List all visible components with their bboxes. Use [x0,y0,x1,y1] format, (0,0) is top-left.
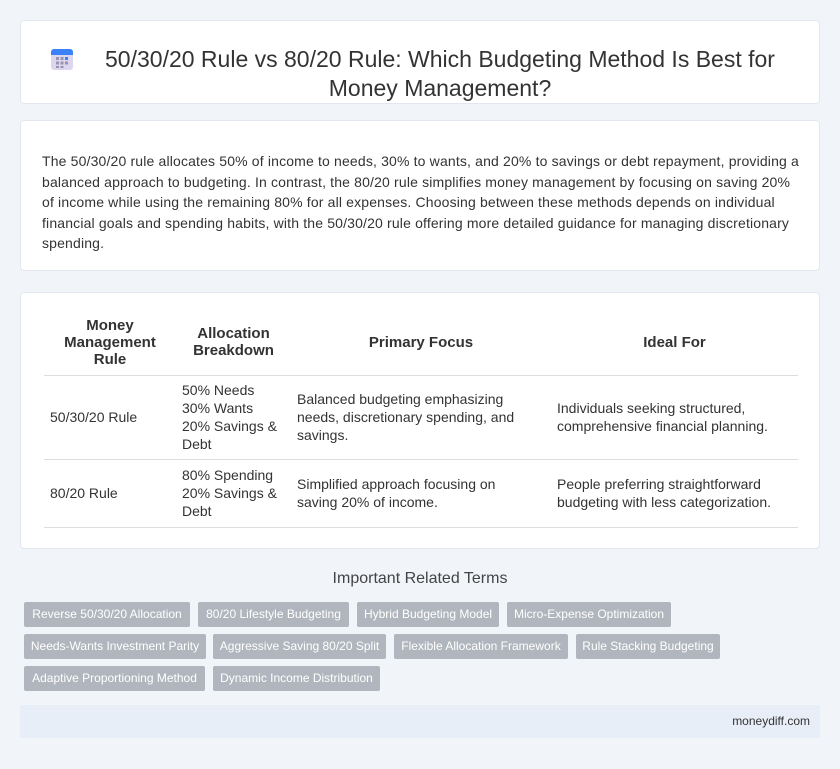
summary text: The 50/30/20 rule allocates 50% of income to needs, 30% to wants, and 20% to savings or debt repayment, providing a balanced approach to budgeting. In contrast, the 80/20 rule simplifies money management by focusing on saving 20% of income while using the remaining 80% for all expenses. Choosing between these methods depends on individual financial goals and spending habits, with the 50/30/20 rule offering more detailed guidance for managing discretionary spending. [42,153,799,251]
tags: Micro-Expense Optimization [514,607,664,621]
comparison table [20,292,820,549]
comparison table: 20% Savings & Debt [182,418,277,452]
comparison table: Simplified approach focusing on [297,476,495,492]
title: 50/30/20 Rule vs 80/20 Rule: Which Budgeting Method Is Best for Money Management? [105,46,775,101]
tags: Reverse 50/30/20 Allocation [32,607,182,621]
tags: Rule Stacking Budgeting [582,639,714,653]
comparison table: Allocation Breakdown [193,325,274,359]
comparison table: Individuals seeking structured, comprehensive financial planning. [557,400,768,434]
footer: moneydiff.com [732,714,810,728]
comparison table: 20% Savings & Debt [182,485,277,519]
comparison table: People preferring straightforward budgeting with less categorization. [557,476,771,510]
comparison table: 50% Needs [182,382,254,398]
footer [20,705,820,738]
tags: Flexible Allocation Framework [401,639,561,653]
tags: Adaptive Proportioning Method [32,671,197,685]
summary text [20,120,820,271]
icon: calendar [51,49,73,70]
comparison table: 30% Wants [182,400,253,416]
comparison table: Primary Focus [369,334,473,351]
tags: Needs-Wants Investment Parity [31,639,199,653]
tags: Dynamic Income Distribution [220,671,373,685]
tags: Aggressive Saving 80/20 Split [220,639,379,653]
tags: 80/20 Lifestyle Budgeting [206,607,341,621]
tags: Hybrid Budgeting Model [364,607,492,621]
header card [20,20,820,104]
comparison table: 80/20 Rule [50,485,118,501]
comparison table: 80% Spending [182,467,273,483]
comparison table: Ideal For [643,334,706,351]
comparison table: Money Management Rule [64,317,156,368]
comparison table: 50/30/20 Rule [50,409,137,425]
comparison table: Balanced budgeting emphasizing needs, discretionary spending, and savings. [297,391,514,443]
comparison table: saving 20% of income. [297,494,438,510]
related terms heading: Important Related Terms [333,570,507,587]
